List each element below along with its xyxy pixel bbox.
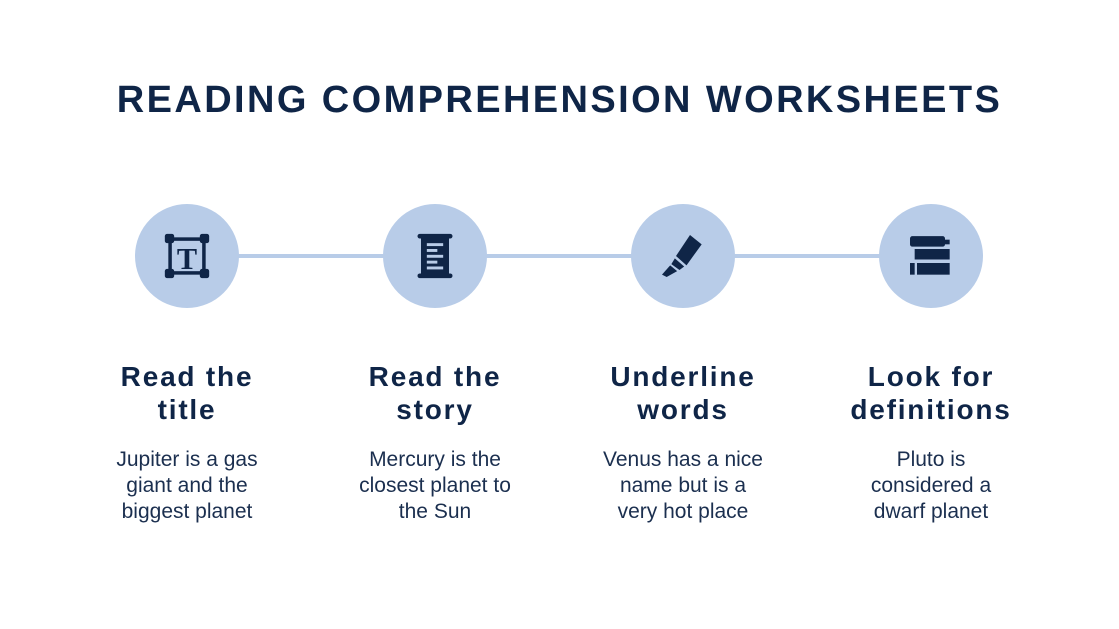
step 4: Pluto is xyxy=(897,448,965,471)
connector line xyxy=(187,254,931,258)
step 1: Jupiter is a gas xyxy=(116,448,258,471)
icon: scroll xyxy=(383,204,487,308)
step 4: considered a xyxy=(871,474,991,497)
icon: text title: T xyxy=(177,242,197,276)
step 1: giant and the xyxy=(126,474,248,497)
step 1: title xyxy=(158,394,216,425)
icon: text title xyxy=(135,204,239,308)
step 2: Read the xyxy=(369,361,501,392)
step 2 xyxy=(359,361,511,523)
step 4: definitions xyxy=(850,394,1012,425)
step 3: Venus has a nice xyxy=(603,448,763,471)
step 3: name but is a xyxy=(620,474,746,497)
step 1: biggest planet xyxy=(122,500,252,523)
icon: highlighter xyxy=(631,204,735,308)
step 3 xyxy=(603,361,763,523)
step 2: story xyxy=(396,394,474,425)
step 3: Underline xyxy=(610,361,756,392)
step 1 xyxy=(116,361,258,523)
step 1: Read the xyxy=(121,361,253,392)
step 4: dwarf planet xyxy=(874,500,988,523)
step 2: the Sun xyxy=(399,500,471,523)
icon: books xyxy=(879,204,983,308)
step 4 xyxy=(850,361,1012,523)
step 3: very hot place xyxy=(618,500,748,523)
step 2: closest planet to xyxy=(359,474,511,497)
step 2: Mercury is the xyxy=(369,448,501,471)
step 4: Look for xyxy=(868,361,994,392)
step 3: words xyxy=(637,394,729,425)
title: READING COMPREHENSION WORKSHEETS xyxy=(117,79,1002,121)
